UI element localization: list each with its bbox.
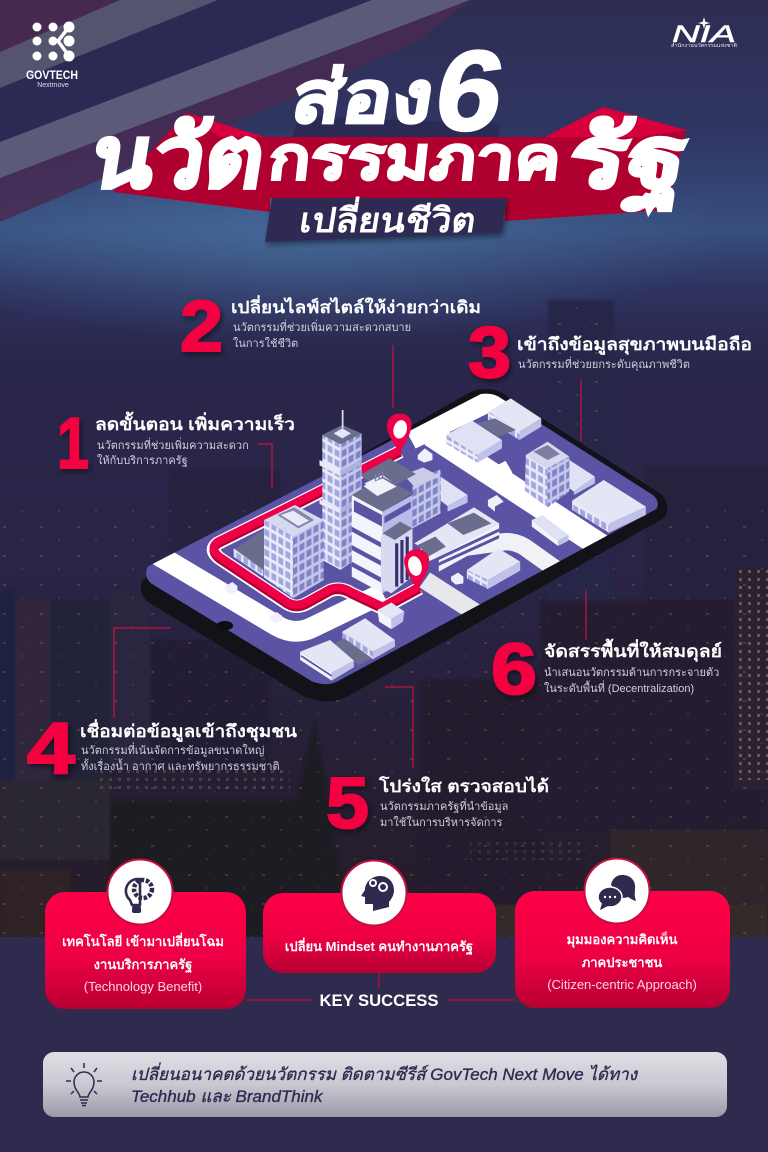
item 3: [468, 313, 752, 393]
card text: (Citizen-centric Approach): [547, 977, 697, 992]
title line 2: นวัต: [85, 110, 272, 206]
building: low dark-roof block: [360, 458, 416, 493]
card text: มุมมองความคิดเห็น: [567, 930, 677, 948]
small cubes right: [488, 495, 569, 546]
route red path: [214, 453, 419, 609]
footer text: เปลี่ยนอนาคตด้วยนวัตกรรม ติดตามซีรีส์ GovTech Next Move ได้ทาง: [131, 1062, 639, 1084]
building: central striped tower: [352, 477, 412, 593]
number 4: 4: [27, 709, 75, 789]
heading 2: เปลี่ยนไลฟ์สไตล์ให้ง่ายกว่าเดิม: [231, 295, 481, 317]
icon: location pin bottom: [404, 549, 429, 589]
heading 3: เข้าถึงข้อมูลสุขภาพบนมือถือ: [517, 334, 752, 356]
card text: เทคโนโลยี เข้ามาเปลี่ยนโฉม: [62, 932, 224, 949]
title line 2: [85, 110, 695, 214]
text 2: นวัตกรรมที่ช่วยเพิ่มความสะดวกสบาย: [233, 319, 411, 334]
card text: งานบริการภาครัฐ: [94, 957, 192, 974]
logo: NIA: [671, 17, 737, 49]
icon: lightbulb: [66, 1063, 102, 1106]
icon: location pin top: [387, 414, 412, 453]
text 5: นวัตกรรมภาครัฐที่นำข้อมูล: [380, 798, 508, 813]
text 1: ให้กับบริการภาครัฐ: [97, 454, 188, 467]
building: bottom low blocks: [300, 618, 395, 681]
heading 4: เชื่อมต่อข้อมูลเข้าถึงชุมชน: [80, 719, 297, 743]
title block: [85, 28, 695, 242]
building: small tower right of centre: [404, 467, 441, 528]
title sub-banner: [265, 196, 507, 242]
icon: lightbulb gear: [108, 860, 172, 924]
logo: GovTech Next Move: Nextmove: [37, 82, 69, 89]
key success connector lines: [246, 973, 515, 1000]
icon: speech bubbles: [584, 858, 650, 924]
key success label: KEY SUCCESS: [320, 991, 438, 1010]
building: low box centre right: [451, 548, 520, 589]
logo: NIA: สำนักงานนวัตกรรมแห่งชาติ: [671, 42, 737, 49]
building: cubes on bottom road: [225, 582, 404, 629]
logo: NIA: NIA: [672, 21, 736, 48]
phone body: [141, 389, 667, 702]
text 5: มาใช้ในการบริหารจัดการ: [380, 816, 503, 829]
building: left low block: [234, 528, 265, 577]
card: technology: [45, 860, 246, 1009]
number 6: 6: [491, 630, 537, 710]
Thai flag brush strokes: [0, 0, 470, 222]
heading 6: จัดสรรพื้นที่ให้สมดุลย์: [544, 638, 722, 662]
building: long flat block: [414, 507, 499, 572]
heading 1: ลดขั้นตอน เพิ่มความเร็ว: [95, 411, 295, 434]
connector lines: [114, 345, 586, 768]
number 1: 1: [57, 404, 89, 484]
card text: ภาคประชาชน: [582, 955, 662, 970]
title number 6: 6: [427, 28, 513, 155]
title line 1: ส่อง: [286, 57, 439, 138]
text 4: ทั้งเรื่องน้ำ อากาศ และทรัพยากรธรรมชาติ: [81, 758, 280, 773]
item 2: [180, 287, 481, 367]
background solid lower band: [0, 937, 768, 1152]
card text: เปลี่ยน Mindset คนทำงานภาครัฐ: [285, 937, 473, 956]
title red ribbon: [113, 107, 686, 221]
building: right tower: [525, 442, 569, 507]
text 2: ในการใช้ชีวิต: [233, 337, 298, 350]
background blue glow: [0, 130, 730, 340]
number 2: 2: [180, 287, 223, 367]
logo: GovTech Next Move: [26, 22, 78, 89]
background night city skyline: [0, 300, 768, 940]
text 4: นวัตกรรมที่เน้นจัดการข้อมูลขนาดใหญ่: [81, 742, 264, 757]
roads: [144, 392, 628, 631]
item 1: [57, 404, 295, 484]
icon: head gears: [342, 860, 406, 926]
text 6: ในระดับพื้นที่ (Decentralization): [544, 680, 694, 695]
item 4: [27, 709, 297, 789]
title line 2: กรรมภาค: [266, 125, 565, 192]
title sub-banner: เปลี่ยนชีวิต: [297, 196, 480, 240]
route outline: [214, 452, 419, 608]
text 1: นวัตกรรมที่ช่วยเพิ่มความสะดวก: [97, 437, 249, 452]
item 5: [326, 764, 549, 844]
title line 2: รัฐ: [561, 110, 695, 214]
item 6: [491, 630, 722, 710]
phone screen: [146, 394, 658, 684]
footer bar: [43, 1052, 727, 1117]
number 3: 3: [468, 313, 511, 393]
heading 5: โปร่งใส ตรวจสอบได้: [378, 776, 549, 796]
text 6: นำเสนอนวัตกรรมด้านการกระจายตัว: [544, 667, 719, 679]
isometric phone city illustration: [141, 389, 667, 702]
logo: GovTech Next Move: GOVTECH: [26, 70, 78, 82]
building: low white block by tower: [418, 448, 468, 512]
phone notch camera: [216, 621, 233, 630]
card text: (Technology Benefit): [84, 979, 202, 994]
card: mindset: [263, 860, 496, 973]
building: right low blocks: [569, 460, 646, 533]
building: left big office: [264, 505, 324, 598]
text 3: นวัตกรรมที่ช่วยยกระดับคุณภาพชีวิต: [518, 356, 690, 371]
building: tall tower: [319, 410, 362, 570]
number 5: 5: [326, 764, 369, 844]
building: low block top right: [446, 398, 541, 463]
card: citizen: [515, 858, 730, 1008]
footer text: Techhub และ BrandThink: [131, 1087, 324, 1106]
